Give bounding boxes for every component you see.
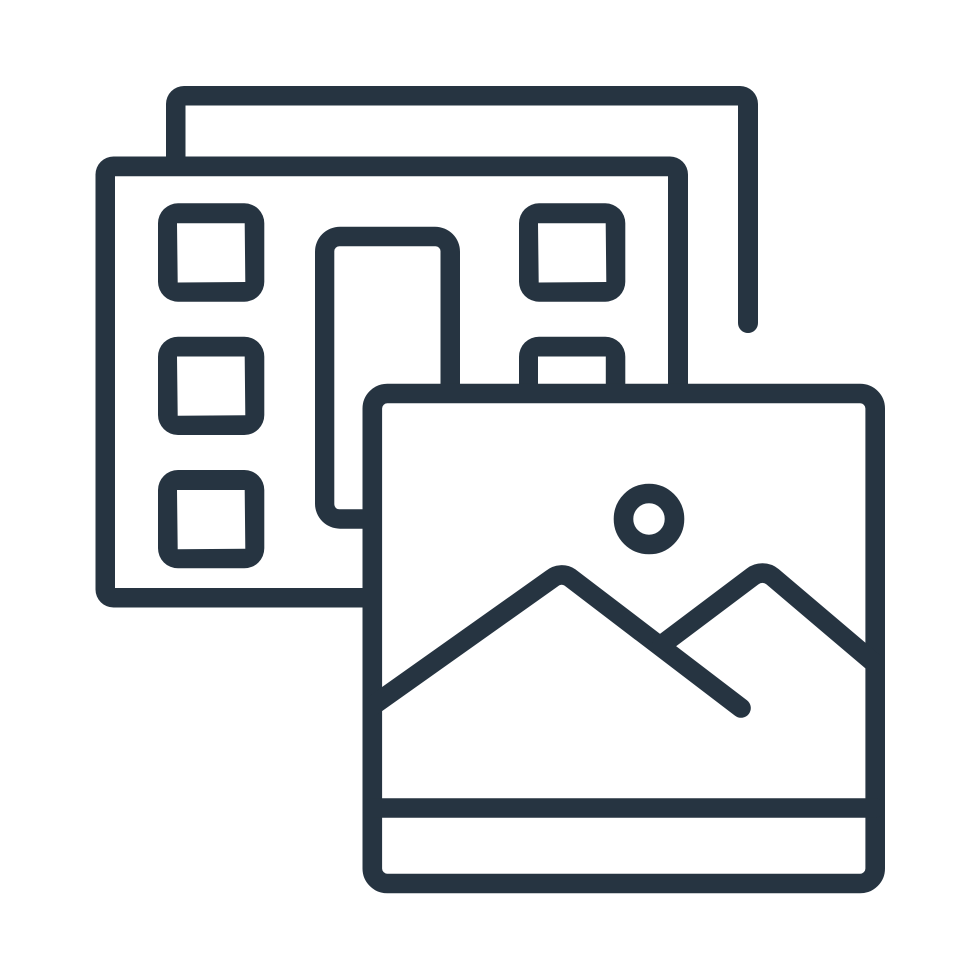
photo caption divider [372,798,875,818]
film hole: middle right [519,337,625,390]
back sheet [166,86,758,333]
film centre window [315,227,460,529]
small mountain [662,573,875,664]
film hole: bottom left [158,470,264,568]
film hole: top left [158,203,264,302]
film strip frame [96,156,688,608]
film hole: top right [519,203,625,302]
film hole: middle left [158,337,264,435]
photo frame [372,394,875,884]
large mountain [372,575,741,708]
sun [624,494,674,544]
